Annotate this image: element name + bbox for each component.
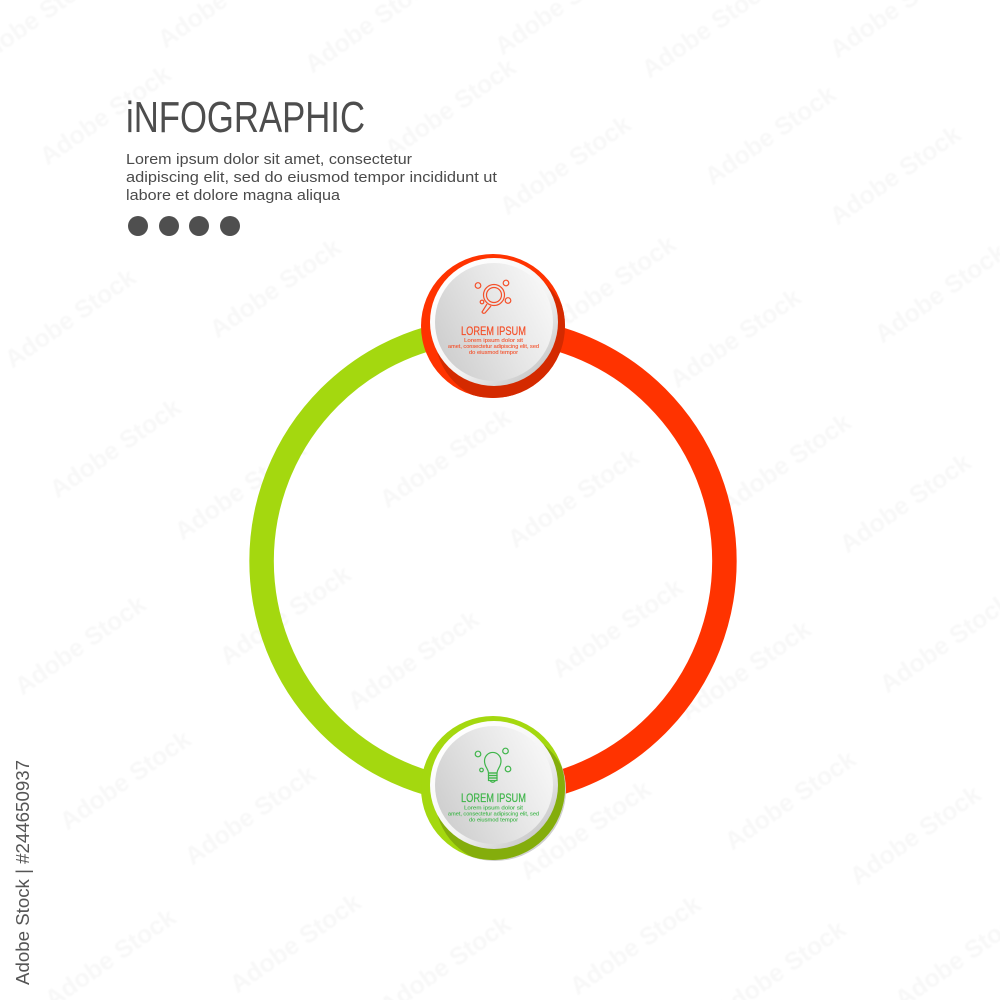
node outer shadow xyxy=(424,719,566,861)
node: top red circle xyxy=(421,254,569,402)
four dots xyxy=(128,216,240,236)
ring: green left arc xyxy=(262,330,493,792)
text: Adobe Stock xyxy=(225,888,366,999)
text: Adobe Stock xyxy=(845,780,986,891)
text: Adobe Stock xyxy=(700,80,841,191)
text: Adobe Stock xyxy=(835,448,976,559)
node text: amet, consectetur adipiscing elit, sed xyxy=(448,344,539,350)
node shadow crescent xyxy=(437,284,565,398)
node text: do eiusmod tempor xyxy=(469,818,518,824)
node heading: LOREM IPSUM xyxy=(461,793,526,805)
node text: amet, consectetur adipiscing elit, sed xyxy=(448,812,539,818)
intro text block xyxy=(126,152,497,204)
text: Adobe Stock xyxy=(0,263,141,374)
text: Adobe Stock xyxy=(215,560,356,671)
node text xyxy=(448,806,539,824)
text: Adobe Stock xyxy=(170,435,311,546)
text: Adobe Stock xyxy=(35,60,176,171)
intro text block: adipiscing elit, sed do eiusmod tempor incididunt ut xyxy=(126,170,497,186)
text: Adobe Stock xyxy=(205,233,346,344)
text: Adobe Stock xyxy=(565,890,706,1000)
text: Adobe Stock xyxy=(540,230,681,341)
text: Adobe Stock xyxy=(495,110,636,221)
icon: light bulb xyxy=(475,748,511,782)
node text: Lorem ipsum dolor sit xyxy=(464,806,523,812)
text: Adobe Stock xyxy=(515,775,656,886)
text: Adobe Stock xyxy=(503,443,644,554)
intro text block: labore et dolore magna aliqua xyxy=(126,188,341,204)
node shadow crescent xyxy=(438,744,565,860)
text: Adobe Stock xyxy=(10,590,151,701)
ring: red right arc xyxy=(493,330,724,792)
text: Adobe Stock xyxy=(715,408,856,519)
text: Adobe Stock xyxy=(720,745,861,856)
icon: magnifying glass xyxy=(475,280,511,313)
text: Adobe Stock xyxy=(547,573,688,684)
text: Adobe Stock xyxy=(380,53,521,164)
text: Adobe Stock xyxy=(55,725,196,836)
node text: Lorem ipsum dolor sit xyxy=(464,338,523,344)
text: Adobe Stock xyxy=(665,283,806,394)
text: Adobe Stock xyxy=(675,615,816,726)
node text: do eiusmod tempor xyxy=(469,350,518,356)
text: Adobe Stock xyxy=(825,120,966,231)
node: bottom green circle xyxy=(421,716,569,864)
node text xyxy=(448,338,539,356)
intro text block: Lorem ipsum dolor sit amet, consectetur xyxy=(126,152,412,168)
text: Adobe Stock xyxy=(180,760,321,871)
side label: Adobe Stock | #244650937 xyxy=(12,760,33,985)
node heading: LOREM IPSUM xyxy=(461,326,526,338)
text: Adobe Stock xyxy=(375,403,516,514)
text: Adobe Stock xyxy=(343,605,484,716)
title: iNFOGRAPHIC xyxy=(126,93,365,142)
text: Adobe Stock xyxy=(45,393,186,504)
